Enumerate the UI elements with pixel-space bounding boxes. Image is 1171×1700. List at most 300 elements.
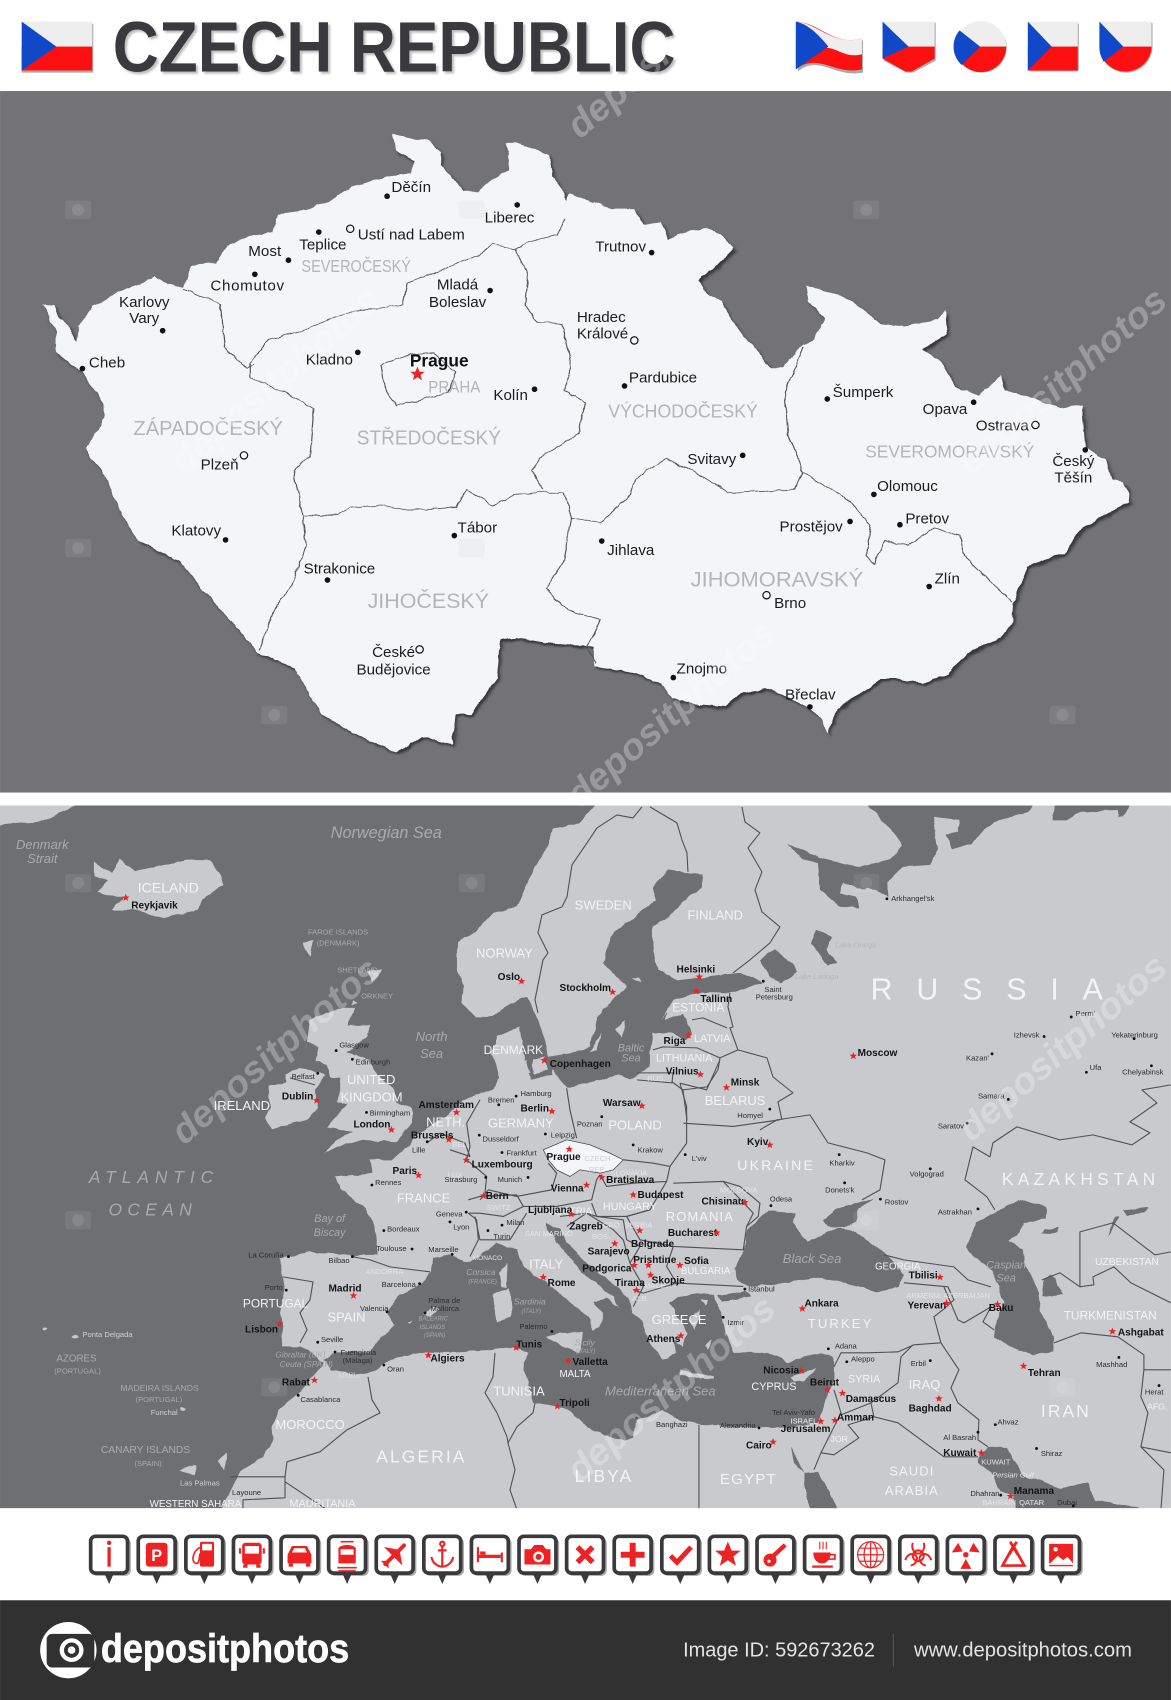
capital city labels: Copenhagen [550,1059,611,1070]
city labels: Pardubice [629,370,697,387]
minor city labels: Glasgow [339,1040,369,1049]
city labels: Cheb [89,355,125,372]
Caspian Sea [966,1200,1054,1355]
capital city labels: Tripoli [559,1398,590,1409]
minor city labels: Layoune [232,1488,261,1497]
minor city labels: Istanbul [748,1284,775,1293]
country labels: MALTA [559,1369,591,1380]
capital city labels: Ankara [805,1298,839,1309]
capital city labels: Warsaw [603,1098,641,1109]
coastlines [0,780,1148,1530]
country labels: ESTONIA [672,1001,724,1015]
minor city labels: Alexandria [720,1421,757,1430]
minor city labels: Rostov [885,1198,909,1207]
country labels: BULGARIA [681,1266,731,1277]
minor city labels: Ahvaz [997,1418,1019,1427]
capital city labels: Beirut [810,1378,840,1389]
minor city labels: Toulouse [376,1244,407,1253]
sea and ocean labels: Lake Ladoga [795,972,839,981]
Sea of Azov [823,1198,874,1227]
minor city labels: Mallorca [430,1304,460,1313]
panel: Europe map [0,780,1171,1530]
Marmara [718,1291,750,1302]
minor city labels: Porto [265,1283,283,1292]
minor city labels: Palma de [428,1296,460,1305]
capital city labels: Lisbon [245,1324,278,1335]
capital city labels: Brussels [411,1130,454,1141]
icon: biohazard [900,1536,940,1584]
country labels: GEORGIA [875,1262,921,1273]
country labels: IRAQ [909,1377,940,1392]
capital city labels: Paris [393,1166,418,1177]
sea and ocean labels: (SPAIN) [424,1333,445,1339]
capital city labels: Helsinki [677,965,715,976]
capital city labels: Zagreb [569,1221,603,1232]
city markers [80,193,1088,710]
city labels: Zlín [935,570,960,587]
minor city labels: Saint [764,985,783,994]
minor city labels: Oran [387,1364,404,1373]
sea and ocean labels: Sicily [575,1337,596,1347]
city labels: Plzeň [201,456,239,473]
minor light labels: AZERBAIJAN [943,1291,990,1300]
minor city labels: Donets'k [825,1186,855,1195]
sea and ocean labels: Gibraltar (UK) [275,1350,326,1359]
icon: parking [138,1536,178,1584]
sea and ocean labels: Baltic [618,1043,645,1055]
watermarks: depositphotos [558,612,783,815]
capital city labels: Bratislava [606,1175,655,1186]
capital city labels: Moscow [858,1048,898,1059]
minor city labels: L'viv [692,1154,707,1163]
city labels: Strakonice [304,561,375,578]
minor city labels: Kharkiv [829,1158,855,1167]
minor city labels: Las Palmas [180,1478,220,1487]
capital city labels: Tirana [615,1278,645,1289]
city labels: Kladno [306,351,353,368]
camera watermarks on background [65,201,1076,724]
city labels: Budějovice [357,661,431,678]
minor city labels: Odesa [770,1194,793,1203]
country labels: SYRIA [848,1373,881,1385]
minor light labels: QATAR [1019,1498,1045,1507]
watermarks: depositphotos [558,1287,783,1490]
country labels: DENMARK [484,1043,543,1057]
minor city labels: Erbil [911,1359,926,1368]
Great Britain [307,1008,412,1153]
minor city labels: Valencia [360,1304,389,1313]
minor light labels: RUS. [647,1074,665,1083]
minor light labels: (SPAIN) [134,1459,162,1468]
icon: star [709,1536,750,1584]
Red Sea [791,1447,838,1508]
icon: car [281,1536,321,1584]
minor light labels: (PORTUGAL) [136,1395,183,1404]
Corsica [499,1263,508,1288]
capital city labels: Ashgabat [1118,1328,1164,1339]
country labels: NORWAY [476,945,533,960]
capital city labels: Luxembourg [472,1160,533,1171]
flag: wave [796,22,863,73]
country labels: PORTUGAL [243,1297,309,1311]
minor city labels: Barcelona [382,1280,417,1289]
minor light labels: LUX [448,1170,463,1179]
minor city labels [82,894,1164,1507]
sea and ocean labels: (ITALY) [576,1349,595,1355]
camera watermarks [65,874,1076,1396]
sea and ocean labels: Black Sea [783,1251,841,1266]
minor city labels: Milan [506,1218,524,1227]
sea and ocean labels: (ITALY) [522,1309,541,1315]
icon: airplane [375,1535,416,1584]
icon: globe [852,1536,892,1584]
camera watermarks on land [459,201,485,557]
minor light labels: FAROE ISLANDS [308,928,368,937]
minor city labels: Adana [835,1342,858,1351]
minor city labels: Kazan' [966,1053,990,1062]
capital city labels: Oslo [498,972,520,983]
capital city labels: Prishtine [633,1255,677,1266]
capital city labels: Yerevan [908,1301,946,1312]
capital: Prague: Prague [410,350,469,370]
capital city labels: Dublin [282,1091,313,1102]
capital city labels: Berlin [520,1103,549,1114]
minor light labels: Persian Gulf [992,1471,1035,1480]
minor city labels: Belfast [292,1072,316,1081]
sea and ocean labels: ATLANTIC [88,1167,219,1187]
minor light labels: BOS. [592,1232,610,1241]
sea and ocean labels: Bay of [314,1213,346,1225]
sea and ocean labels: Sardinia [514,1296,546,1306]
minor city labels: Hamburg [520,1089,552,1098]
minor city labels: Casablanca [300,1395,341,1404]
Lake Ladoga [760,950,797,983]
minor light labels: ANDORRA [365,1267,404,1276]
minor city labels: Munich [498,1175,522,1184]
Sicily [545,1333,583,1353]
country labels [138,879,1167,1510]
country labels: NETH. [426,1114,465,1129]
country labels: HUNGARY [603,1201,657,1213]
Sardinia [493,1288,512,1323]
minor city labels: Ufa [1090,1063,1102,1072]
city labels: Chomutov [210,278,285,295]
city labels: Klatovy [171,523,221,540]
minor city labels: Izmir [728,1318,744,1327]
minor city labels: Poznan [577,1119,603,1128]
flag variants [796,21,1153,73]
Persian Gulf [978,1446,1138,1508]
Ireland [265,1067,325,1130]
Aegean islands [690,1310,700,1330]
minor city labels: Dusseldorf [483,1135,520,1144]
minor city labels: Perm' [1076,1009,1096,1018]
sea and ocean labels: Strait [27,851,59,866]
watermarks: depositphotos [950,946,1171,1149]
seas and lakes [0,780,1148,1530]
country borders [230,807,1171,1510]
minor city labels: Strasburg [445,1175,477,1184]
country labels: MOROCCO [275,1417,345,1432]
map background [0,91,1171,793]
minor city labels: La Coruña [248,1251,284,1260]
sea and ocean labels [16,824,1026,1398]
city labels: České [372,644,415,661]
sea and ocean labels: (FRANCE) [468,1280,497,1286]
icon: radiation [947,1536,988,1584]
country labels: WESTERN SAHARA [150,1499,242,1510]
country labels: SAUDI [889,1464,934,1479]
image id: Image ID: 592673262 [683,1639,875,1662]
Crete [681,1370,714,1380]
capital city labels: Vienna [551,1184,584,1195]
icon: bus [233,1536,274,1584]
city labels [89,179,1095,703]
minor light labels: SHETLAND [337,966,378,975]
Mediterranean Sea [324,1223,834,1442]
minor light labels: MACE. [644,1281,668,1290]
logo wordmark: depositphotos [101,1627,349,1671]
flag: Czech rectangle [22,22,93,73]
minor city labels: Edinburgh [356,1058,390,1067]
flag: circle [954,21,1007,73]
capital city labels: Riga [664,1036,686,1047]
minor city labels: Birmingham [370,1109,410,1118]
country labels: ARABIA [885,1483,939,1498]
icon: anchor [424,1536,464,1584]
minor light labels: SLOVAKIA [610,1168,648,1177]
flag: square [1028,22,1079,72]
capital city labels: Cairo [746,1440,772,1451]
footer background [0,1600,1171,1700]
capital city labels: Amsterdam [419,1100,474,1111]
capital city labels: Damascus [846,1394,897,1405]
minor city labels: Tel Aviv-Yafo [772,1408,815,1417]
sea and ocean labels: Norwegian Sea [331,824,442,842]
minor light labels [54,928,1045,1507]
panel: Czech Republic regional map [0,91,1171,793]
country labels: RUSSIA [871,974,1127,1007]
website: www.depositphotos.com [913,1639,1132,1662]
capital city labels: Madrid [329,1283,362,1294]
minor light labels: SERBIA [625,1220,653,1229]
minor city labels: Mashhad [1096,1360,1127,1369]
city labels: Děčín [391,179,431,196]
minor light labels: AZORES [56,1354,97,1365]
capital city labels: Algiers [430,1354,465,1365]
country labels: IRELAND [214,1098,270,1113]
Black Sea [734,1210,904,1292]
country labels: BELARUS [705,1093,766,1108]
minor city labels: Al Basrah [943,1433,976,1442]
capital city labels [131,901,1164,1497]
capital star markers [122,894,1116,1499]
Cyprus [790,1368,816,1382]
city labels: Ustí nad Labem [358,227,465,244]
minor city labels: Lille [412,1145,426,1154]
header [22,8,1153,88]
country labels: UKRAINE [737,1157,815,1173]
sea and ocean labels: BALEARIC [419,1317,449,1323]
city labels: Teplice [299,236,346,253]
capital city labels: Athens [646,1334,681,1345]
country labels: GREECE [652,1312,707,1327]
minor city labels: Petersburg [756,993,793,1002]
icon row [91,1535,1083,1584]
region names: STŘEDOČESKÝ [357,427,501,450]
minor city labels: Geneva [436,1209,463,1218]
minor city dots [285,897,1160,1507]
capital city labels: Skopje [652,1276,685,1287]
minor light labels: (DENMARK) [317,938,360,947]
minor city labels: Samara [978,1091,1005,1100]
minor light labels: SAN MARINO [525,1229,573,1238]
minor city labels: Bordeaux [387,1225,420,1234]
icon: camera [519,1536,559,1584]
country labels: ICELAND [138,879,199,895]
country labels: AFG. [1147,1401,1167,1411]
capital city labels: Jerusalem [781,1424,831,1435]
city labels: Břeclav [785,686,836,703]
sea and ocean labels: Sea [420,1046,443,1061]
minor city labels: Leipzig [551,1130,575,1139]
country labels: SPAIN [327,1310,366,1325]
region names: SEVEROMORAVSKÝ [865,442,1035,462]
minor city labels: Volgograd [910,1169,944,1178]
capital city labels: Baghdad [909,1404,952,1415]
capital city labels: Amman [837,1412,874,1423]
sea and ocean labels: Denmark [16,837,70,852]
capital: Prague [410,350,469,380]
capital city labels: Valletta [572,1357,608,1368]
country labels: AUSTRIA [550,1206,592,1217]
icon: coffee cup [805,1536,845,1584]
minor city labels: Dubai [1057,1498,1077,1507]
country labels: FINLAND [687,907,743,922]
city labels: Pretov [905,511,950,528]
icon: info [91,1536,131,1584]
minor city labels: Rennes [375,1178,401,1187]
central Europe borders and Czech highlight [427,1060,780,1306]
capital city labels: Ljubljana [528,1205,573,1216]
capital city labels: Manama [1014,1486,1054,1497]
city labels: Boleslav [429,294,487,311]
minor city labels: (Málaga) [343,1356,373,1365]
land background [222,806,1171,1508]
icon: train [329,1536,369,1584]
icon: first aid plus [614,1536,654,1584]
country labels: LATVIA [694,1033,731,1045]
flag: shield [883,22,936,73]
minor city labels: Bremen [488,1096,514,1105]
capital city labels: Kyiv [747,1137,769,1148]
country labels: LITHUANIA [656,1052,713,1064]
watermarks: depositphotos [163,949,388,1152]
sea and ocean labels: Biscay [314,1227,346,1239]
capital city labels: Kuwait [943,1448,977,1459]
Baltic islands [615,1020,625,1037]
minor light labels: CRO. [603,1220,622,1229]
minor light labels: MONACO [473,1255,502,1262]
city labels: Kolín [493,387,528,404]
sea and ocean labels: Lake Onega [835,941,876,950]
minor city labels: Chelyabinsk [1122,1067,1164,1076]
minor city labels: Krakow [638,1145,663,1154]
watermarks: depositphotos [163,279,388,482]
city labels: Mladá [437,276,479,293]
capital city labels: Prague [546,1152,581,1163]
minor light labels: MADEIRA ISLANDS [120,1383,199,1393]
title: CZECH REPUBLIC [113,8,675,88]
country labels: LIBYA [575,1466,633,1486]
sea and ocean labels: Corsica [466,1267,496,1277]
city labels: Trutnov [595,239,646,256]
icon: bed [471,1536,512,1584]
capital city labels: Bucharest [668,1228,718,1239]
country labels: FRANCE [397,1190,451,1205]
minor city labels: Bilbao [329,1256,350,1265]
minor light labels: BEL. [452,1140,469,1149]
city labels: Most [248,243,282,260]
minor light labels: KUWAIT [981,1458,1011,1467]
capital city labels: Vilnius [666,1066,699,1077]
city labels: Opava [923,401,968,418]
watermarks: depositphotos [950,279,1171,482]
sea and ocean labels: ISLANDS [420,1325,445,1331]
capital city labels: Budapest [638,1190,684,1201]
city labels: Šumperk [833,384,894,401]
footer [0,1600,1171,1700]
city labels: Prostějov [780,518,843,535]
country labels: TURKMENISTAN [1064,1308,1157,1322]
minor light labels: ORKNEY [361,992,393,1001]
minor city labels: Homyel [737,1111,763,1120]
minor light labels: CANARY ISLANDS [101,1445,190,1456]
city labels: Liberec [485,209,535,226]
minor city labels: Aleppo [851,1355,875,1364]
Baltic Sea [543,870,762,1088]
region names: VÝCHODOČESKÝ [608,400,758,421]
region names: ZÁPADOČESKÝ [133,417,283,440]
country labels: CZECH [584,1154,611,1163]
capital city labels: Belgrade [631,1239,675,1250]
sea and ocean labels: OCEAN [108,1199,197,1219]
capital city labels: Tunis [516,1340,543,1351]
logo: camera badge [40,1622,97,1678]
capital city labels: Chisinau [702,1197,744,1208]
minor city labels: Fuengirola [340,1348,377,1357]
capital city labels: Tallinn [700,994,732,1005]
country labels: ITALY [529,1256,564,1271]
sea and ocean labels: Sea [621,1052,641,1064]
minor city labels: Shiraz [1041,1449,1063,1458]
capital city labels: Sofia [684,1256,709,1267]
region names: PRAHA [428,378,480,396]
minor city labels: Saratov [938,1122,964,1131]
country labels: ISRAEL [790,1417,817,1426]
country labels: CYPRUS [751,1381,797,1393]
country labels: EGYPT [720,1471,777,1488]
map: Czech land and region borders [43,134,1130,752]
Lake Onega [812,930,838,965]
minor city labels: Banghazi [656,1420,688,1429]
country labels: KINGDOM [340,1090,403,1105]
minor city labels: Seville [321,1335,343,1344]
capital city labels: Podgorica [582,1264,632,1275]
minor light labels: SWITZ. [487,1203,513,1212]
sea and ocean labels: Caspian [986,1259,1026,1271]
country labels: JOR. [831,1434,850,1444]
